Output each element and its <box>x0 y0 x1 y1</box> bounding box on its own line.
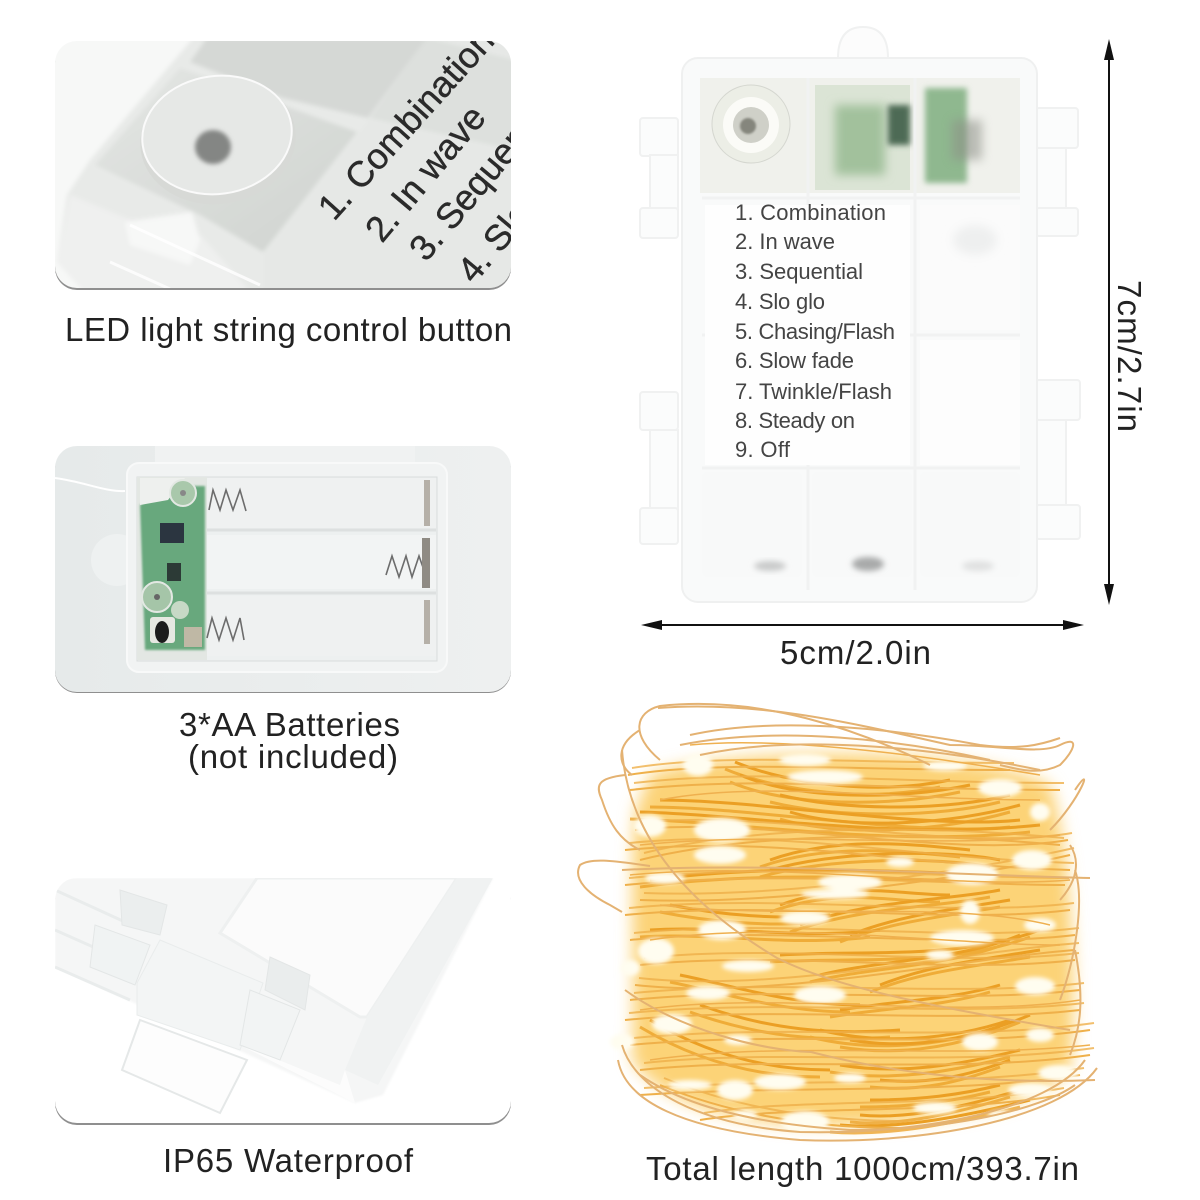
duplicated mid wires <box>629 760 1094 1121</box>
printed mode list: 4. Slo glo <box>735 289 825 314</box>
duplicated orange wires <box>630 769 1030 1133</box>
caption: batteries <box>179 706 400 775</box>
label: height: 7cm/2.7in <box>1111 280 1148 432</box>
battery contacts <box>422 480 430 644</box>
caption: total length: Total length 1000cm/393.7in <box>646 1150 1079 1187</box>
printed mode list: 7. Twinkle/Flash <box>735 379 892 404</box>
circuit board <box>137 477 207 660</box>
photo: coiled fairy light string <box>578 704 1097 1141</box>
caption: waterproof: IP65 Waterproof <box>163 1142 414 1179</box>
arrow: height dimension <box>1104 39 1114 605</box>
icon: round button <box>141 74 293 196</box>
panel: battery compartment photo <box>55 446 511 693</box>
printed mode list: 1. Combination <box>735 200 886 225</box>
panel: waterproof case photo <box>55 878 511 1125</box>
mid wires <box>625 767 1090 1128</box>
panel: control button photo <box>55 41 511 290</box>
printed mode list: 8. Steady on <box>735 408 855 433</box>
printed mode list: 9. Off <box>735 437 791 462</box>
printed mode list <box>735 200 895 462</box>
panel: battery box product photo <box>640 27 1080 602</box>
label: width: 5cm/2.0in <box>780 634 931 671</box>
caption: control button: LED light string control button <box>65 311 512 348</box>
deep orange wire bundles <box>640 762 1040 1126</box>
arrow: width dimension <box>641 620 1084 630</box>
caption: batteries: (not included) <box>188 738 398 775</box>
icon: power button <box>712 85 790 163</box>
printed mode list on box: 2. In wave <box>357 97 494 249</box>
printed mode list on box: 4. Slo glo <box>449 149 577 290</box>
printed mode list: 2. In wave <box>735 229 835 254</box>
side clips <box>640 108 1080 544</box>
printed mode list: 5. Chasing/Flash <box>735 319 895 344</box>
icon: battery springs <box>207 490 426 640</box>
printed mode list on box: 1. Combination <box>309 20 502 227</box>
caption: batteries: 3*AA Batteries <box>179 706 400 743</box>
warm glow core <box>632 754 1073 1125</box>
outer pale loops and stray wires <box>578 704 1097 1141</box>
printed mode list: 6. Slow fade <box>735 348 854 373</box>
printed mode list on box <box>320 41 511 281</box>
printed mode list: 3. Sequential <box>735 259 863 284</box>
battery holder box <box>127 463 447 672</box>
icon: case clip <box>90 890 310 1113</box>
thin highlight wires over lights <box>630 743 1090 1060</box>
LED lights <box>610 754 1078 1133</box>
printed mode list on box: 3. Sequential <box>401 81 567 268</box>
